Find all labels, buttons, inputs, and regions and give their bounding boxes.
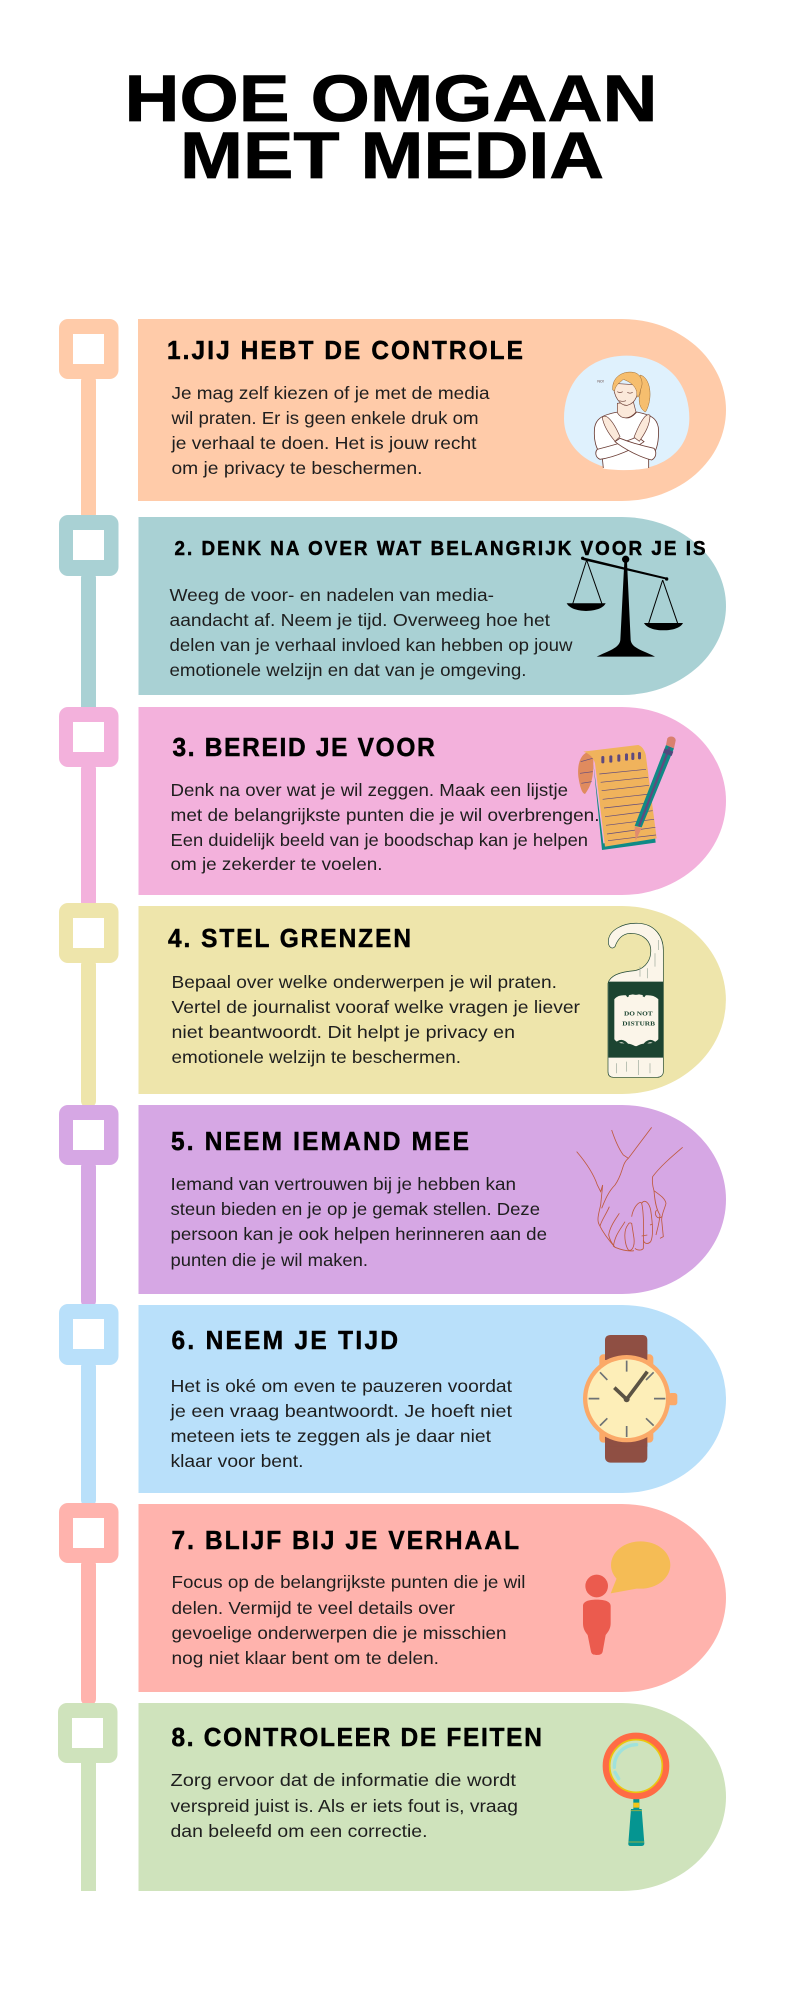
body text 3: Een duidelijk beeld van je boodschap kan je helpen (170, 830, 588, 850)
icon: woman crossing arms saying no: NO! (597, 380, 604, 384)
body text 4: emotionele welzijn te beschermen. (172, 1047, 461, 1067)
timeline step 5 (59, 1105, 118, 1307)
timeline step 3 (59, 707, 118, 908)
body text 7: nog niet klaar bent om te delen. (172, 1648, 439, 1668)
body text 6: Het is oké om even te pauzeren voordat (170, 1376, 512, 1396)
icon: notepad and pencil (578, 737, 676, 850)
body text 3: met de belangrijkste punten die je wil overbrengen. (170, 805, 600, 825)
timeline step 2 (59, 515, 118, 717)
heading 6: 6. NEEM JE TIJD (172, 1326, 398, 1355)
title: HOE OMGAAN (124, 61, 658, 135)
body text 7: gevoelige onderwerpen die je misschien (172, 1623, 506, 1643)
timeline step 4 (59, 903, 118, 1107)
heading 1: 1.JIJ HEBT DE CONTROLE (167, 336, 523, 365)
body text 6 (169, 1376, 512, 1471)
icon: wristwatch (583, 1335, 677, 1463)
icon: balance scale (567, 556, 683, 657)
body text 6: meteen iets te zeggen als je daar niet (170, 1426, 491, 1446)
body text 3: Denk na over wat je wil zeggen. Maak een lijstje (170, 780, 568, 800)
body text 1 (170, 383, 490, 478)
heading 2: 2. DENK NA OVER WAT BELANGRIJK VOOR JE IS (174, 537, 706, 560)
panel: step 4 (138, 906, 726, 1094)
icon: magnifying glass (606, 1736, 666, 1846)
panel: step 5 (138, 1105, 726, 1294)
body text 4: Bepaal over welke onderwerpen je wil praten. (172, 972, 557, 992)
panel: step 6 (138, 1305, 726, 1493)
timeline step 6 (59, 1304, 118, 1506)
body text 2: Weeg de voor- en nadelen van media- (170, 585, 494, 605)
icon: holding hands line drawing (577, 1127, 683, 1251)
icon: do not disturb door hanger: DO NOT (624, 1010, 653, 1017)
body text 3 (170, 780, 600, 874)
heading 7: 7. BLIJF BIJ JE VERHAAL (172, 1526, 519, 1555)
body text 6: klaar voor bent. (170, 1451, 304, 1471)
body text 8 (170, 1770, 518, 1841)
heading 8: 8. CONTROLEER DE FEITEN (172, 1723, 542, 1752)
body text 8: verspreid juist is. Als er iets fout is, vraag (170, 1796, 518, 1816)
body text 1: je verhaal te doen. Het is jouw recht (170, 433, 477, 453)
body text 4: niet beantwoordt. Dit helpt je privacy en (172, 1022, 515, 1042)
body text 2: emotionele welzijn en dat van je omgeving. (170, 660, 526, 680)
timeline step 8 (58, 1703, 118, 1891)
body text 2 (170, 585, 573, 680)
body text 8: Zorg ervoor dat de informatie die wordt (170, 1770, 516, 1790)
title (124, 61, 658, 192)
body text 3: om je zekerder te voelen. (170, 854, 382, 874)
title: MET MEDIA (180, 118, 604, 192)
body text 5 (170, 1174, 547, 1270)
icon: do not disturb door hanger: DISTURB (622, 1021, 656, 1028)
body text 1: Je mag zelf kiezen of je met de media (172, 383, 490, 403)
body text 6: je een vraag beantwoordt. Je hoeft niet (169, 1401, 512, 1421)
body text 7: Focus op de belangrijkste punten die je wil (172, 1572, 526, 1592)
body text 2: delen van je verhaal invloed kan hebben op jouw (170, 635, 573, 655)
body text 2: aandacht af. Neem je tijd. Overweeg hoe het (170, 610, 550, 630)
panel: step 1 (138, 319, 726, 501)
body text 5: Iemand van vertrouwen bij je hebben kan (170, 1174, 516, 1194)
body text 1: om je privacy te beschermen. (172, 458, 422, 478)
panel: step 7 (138, 1504, 726, 1692)
heading 5: 5. NEEM IEMAND MEE (171, 1127, 469, 1156)
icon: person with speech bubble (583, 1541, 670, 1655)
body text 5: persoon kan je ook helpen herinneren aan de (170, 1224, 547, 1244)
body text 4: Vertel de journalist vooraf welke vragen je liever (172, 997, 580, 1017)
heading 4: 4. STEL GRENZEN (168, 924, 411, 953)
body text 1: wil praten. Er is geen enkele druk om (170, 408, 478, 428)
body text 4 (172, 972, 580, 1067)
heading 3: 3. BEREID JE VOOR (172, 733, 435, 762)
body text 7 (172, 1572, 526, 1668)
body text 5: punten die je wil maken. (170, 1250, 368, 1270)
panel: step 8 (138, 1703, 726, 1891)
body text 8: dan beleefd om een correctie. (170, 1821, 428, 1841)
icon: do not disturb door hanger (608, 923, 663, 1077)
timeline step 7 (59, 1503, 118, 1705)
body text 5: steun bieden en je op je gemak stellen. Deze (170, 1199, 540, 1219)
panel: step 3 (138, 707, 726, 895)
timeline step 1 (59, 319, 118, 520)
panel: step 2 (138, 517, 726, 695)
icon: woman crossing arms saying no (564, 356, 689, 470)
body text 7: delen. Vermijd te veel details over (172, 1598, 455, 1618)
